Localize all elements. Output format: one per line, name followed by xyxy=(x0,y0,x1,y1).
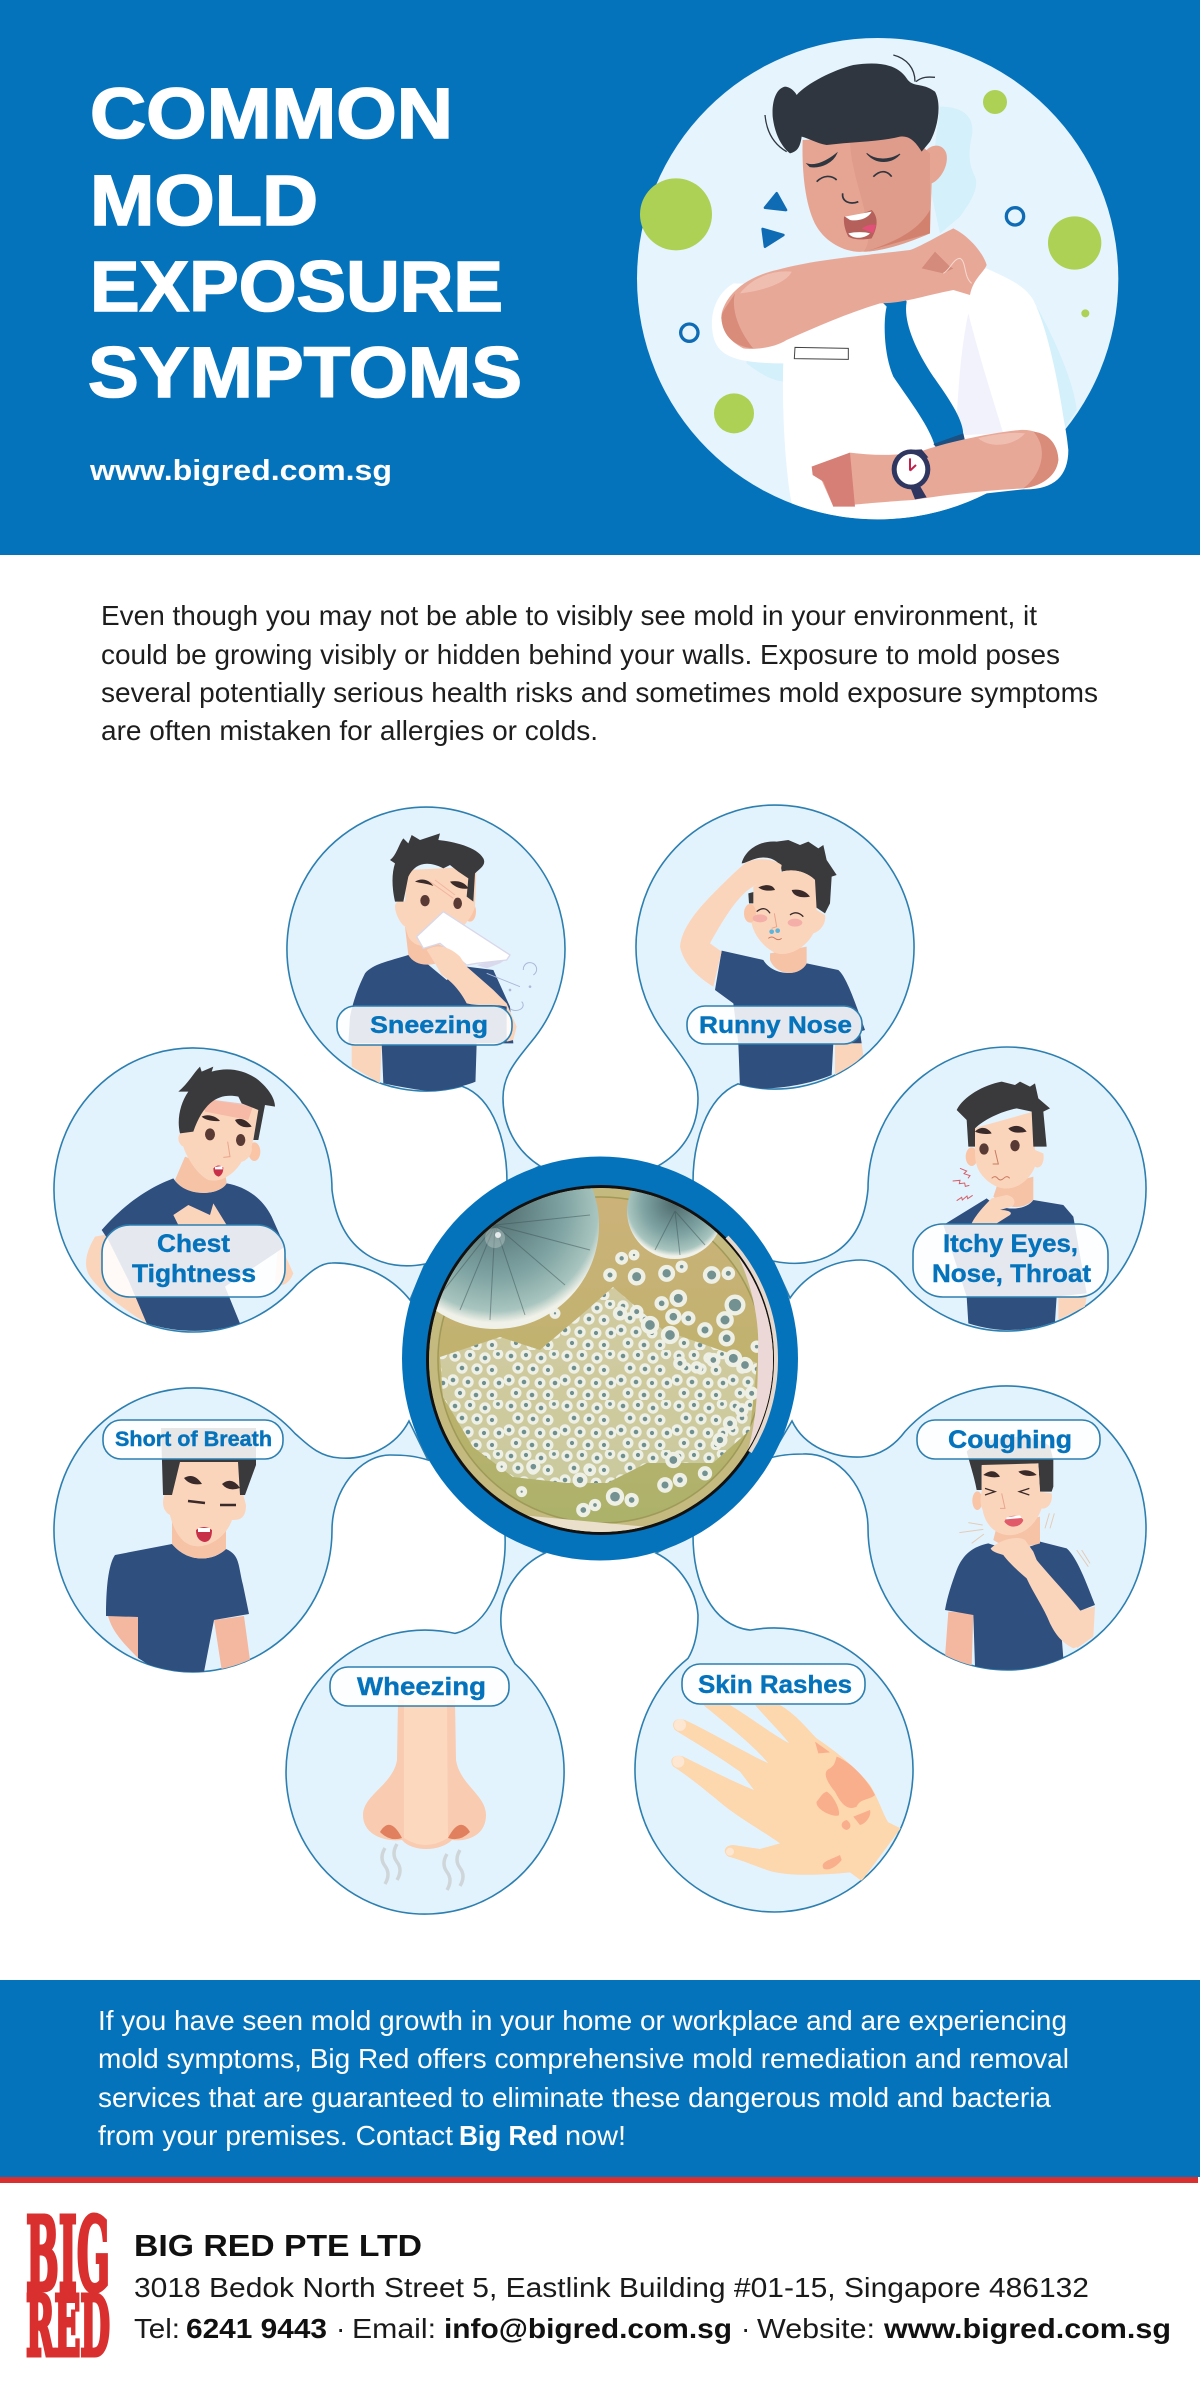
lobe: itchy eyes, nose, throat xyxy=(773,1047,1146,1331)
label: chest tightness: Chest xyxy=(157,1230,231,1258)
intro paragraph: several potentially serious health risks and sometimes mold exposure symptoms xyxy=(101,677,1098,708)
contact line xyxy=(134,2313,1171,2344)
mold colonies xyxy=(440,1287,757,1483)
contact line: 6241 9443 xyxy=(186,2313,327,2344)
call to action text xyxy=(98,2005,1069,2151)
label: coughing xyxy=(917,1420,1100,1459)
contact line: · xyxy=(336,2313,345,2344)
intro paragraph xyxy=(101,600,1098,746)
label: chest tightness: Tightness xyxy=(132,1260,256,1288)
call to action text: from your premises. Contact xyxy=(98,2120,453,2151)
label: itchy eyes: Itchy Eyes, xyxy=(943,1230,1078,1258)
address: 3018 Bedok North Street 5, Eastlink Building #01-15, Singapore 486132 xyxy=(134,2272,1089,2303)
website url: www.bigred.com.sg xyxy=(89,455,392,487)
intro paragraph: Even though you may not be able to visibly see mold in your environment, it xyxy=(101,600,1037,631)
lobe: wheezing xyxy=(286,1535,564,1914)
label: sneezing xyxy=(337,1006,512,1045)
call to action text: Big Red xyxy=(459,2120,558,2151)
label: itchy eyes: Nose, Throat xyxy=(932,1260,1092,1288)
icon: hand with rash xyxy=(671,1705,901,1881)
label: itchy eyes xyxy=(913,1224,1108,1297)
call to action panel xyxy=(0,1980,1200,2183)
lobe: coughing xyxy=(770,1386,1146,1670)
title: SYMPTOMS xyxy=(88,334,522,413)
contact line: info@bigred.com.sg xyxy=(444,2313,732,2344)
label: coughing: Coughing xyxy=(948,1426,1072,1454)
label: sneezing: Sneezing xyxy=(370,1012,488,1039)
header panel xyxy=(0,0,1200,555)
label: skin rashes xyxy=(682,1664,865,1704)
contact line: · xyxy=(741,2313,750,2344)
footer: BIG xyxy=(26,2195,110,2314)
title: COMMON xyxy=(90,75,453,154)
contact line: Website: xyxy=(757,2313,875,2344)
lower arm and watch xyxy=(812,430,1058,507)
call to action text: If you have seen mold growth in your home or workplace and are experiencing xyxy=(98,2005,1067,2036)
label: runny nose xyxy=(687,1006,862,1044)
label: wheezing: Wheezing xyxy=(357,1673,486,1701)
logo: big red xyxy=(26,2195,110,2375)
footer xyxy=(26,2195,1171,2375)
label: wheezing xyxy=(330,1667,509,1706)
icon: nose xyxy=(363,1700,486,1890)
label: short of breath: Short of Breath xyxy=(115,1428,272,1451)
hub diagram xyxy=(54,805,1146,1914)
raised arm xyxy=(721,228,987,349)
label: short of breath xyxy=(103,1420,283,1459)
lobe: sneezing xyxy=(287,807,565,1182)
red rule xyxy=(0,2177,1198,2183)
call to action text: mold symptoms, Big Red offers comprehensive mold remediation and removal xyxy=(98,2043,1069,2074)
contact line: Tel: xyxy=(134,2313,180,2344)
call to action text: services that are guaranteed to eliminate these dangerous mold and bacteria xyxy=(98,2082,1051,2113)
company name: BIG RED PTE LTD xyxy=(134,2228,422,2263)
illustration: coughing man xyxy=(637,38,1118,519)
lobe: skin rashes xyxy=(635,1535,913,1912)
shirt xyxy=(712,268,1068,519)
head xyxy=(802,135,947,252)
lobe: chest tightness xyxy=(54,1048,425,1332)
contact line: Email: xyxy=(352,2313,436,2344)
title: EXPOSURE xyxy=(90,248,503,327)
label: runny nose: Runny Nose xyxy=(699,1012,852,1039)
intro paragraph: could be growing visibly or hidden behind your walls. Exposure to mold poses xyxy=(101,639,1060,670)
lobe: short of breath xyxy=(54,1388,428,1672)
label: skin rashes: Skin Rashes xyxy=(698,1671,852,1699)
lobe: runny nose xyxy=(636,805,914,1182)
central hub: mold petri dish xyxy=(402,1156,798,1560)
contact line: www.bigred.com.sg xyxy=(883,2313,1171,2344)
label: chest tightness xyxy=(102,1225,285,1297)
intro paragraph: are often mistaken for allergies or colds. xyxy=(101,715,598,746)
title: MOLD xyxy=(90,162,318,241)
call to action text: now! xyxy=(565,2120,626,2151)
footer: RED xyxy=(26,2279,110,2375)
title xyxy=(88,75,522,413)
